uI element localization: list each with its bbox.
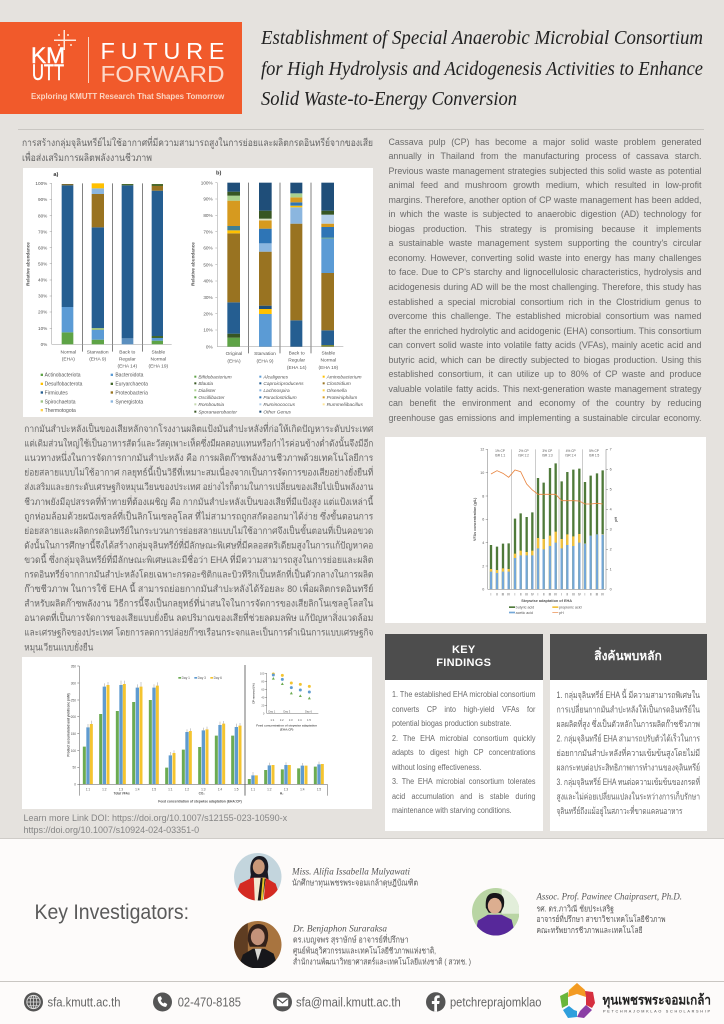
English body paragraph: a sustainable waste management system supporting the country's circular xyxy=(388,238,702,248)
Thai heading xyxy=(22,136,373,164)
logo wordmark: PETCHRAJOMKLAO SCHOLARSHIP xyxy=(603,1010,710,1014)
chart b: genus abundance: 30% xyxy=(203,295,213,300)
logo wordmark FUTURE FORWARD xyxy=(100,40,224,84)
footer contact: phone xyxy=(153,992,241,1012)
logo mark: KMUTT xyxy=(31,30,76,84)
inset: CP removal plot: 80 xyxy=(261,679,265,683)
chart b: genus abundance: 0% xyxy=(206,344,213,349)
bar Starvation xyxy=(259,183,272,347)
propionic acid bars xyxy=(491,532,603,589)
panel: gas production chart: 0 xyxy=(74,783,76,787)
panel: gas production chart: 1:4 xyxy=(218,788,222,792)
name: Benjaphon: Dr. Benjaphon Suraraksa xyxy=(293,924,387,934)
findings list: 2. The EHA microbial consortium quickly xyxy=(392,734,535,743)
footer contact: facebook xyxy=(426,992,542,1012)
panel: gas production chart: 1:1 xyxy=(251,788,255,792)
panel: VFA stepwise adaptation chart: VFAs concentration (g/L) xyxy=(473,497,477,541)
panel: VFA stepwise adaptation chart: II xyxy=(566,593,568,597)
footer contact: email xyxy=(273,992,401,1012)
panel: gas production chart: Feed concentration of stepwise adaptation (EHA:CP) xyxy=(158,799,242,803)
panel: gas production chart: 1:1 xyxy=(168,788,173,792)
panel: VFA stepwise adaptation chart: 4 xyxy=(482,541,484,545)
panel: VFA stepwise adaptation chart: 5% CP xyxy=(589,449,599,453)
panel: gas production chart: CO₂ xyxy=(199,792,205,796)
axes xyxy=(77,666,327,796)
findings list: 3. The EHA microbial consortium tolerates xyxy=(392,777,535,786)
chart b: genus abundance: Relative abundance xyxy=(190,242,195,286)
chart b: genus abundance: (EHA) xyxy=(227,358,241,364)
inset: CP removal plot: Day 1 xyxy=(268,709,276,713)
panel: gas production chart: 1:5 xyxy=(152,788,156,792)
legend a: Euryarchaeota xyxy=(115,382,148,388)
inset: CP removal plot: 1:1 xyxy=(270,718,275,722)
panel: gas production chart: 150 xyxy=(71,732,76,736)
English body paragraph: biogas production. This strategy is promising because it implements xyxy=(388,224,702,234)
English body paragraph: greenhouse gas emissions and implementing a sustainable circular economy. xyxy=(388,413,702,423)
panel: VFA stepwise adaptation chart: 10 xyxy=(480,471,484,475)
chart b: genus abundance: 70% xyxy=(203,229,213,234)
legend a: Proteobacteria xyxy=(115,390,148,396)
bar Starvation xyxy=(92,183,104,344)
panel: VFA stepwise adaptation chart: III xyxy=(596,593,598,597)
panel: gas production chart: 50 xyxy=(72,766,76,770)
panel: gas production chart: 1:2 xyxy=(267,788,272,792)
legend a: Synergistota xyxy=(115,399,143,405)
bar Stable Normal xyxy=(152,184,163,344)
Thai findings list xyxy=(556,688,700,817)
panel: gas production chart: 1:3 xyxy=(284,788,288,792)
bar Back to Regular xyxy=(122,184,133,344)
panel: gas production chart xyxy=(22,657,372,809)
panel: VFA stepwise adaptation chart: 3% CP xyxy=(542,449,552,453)
legend b: Dialister xyxy=(198,388,216,394)
legend b: Oscillibacter xyxy=(198,395,225,401)
legend b: Paraclostridium xyxy=(263,395,297,401)
Thai heading: เพื่อส่งเสริมการผลิตพลังงานชีวภาพ xyxy=(22,151,152,164)
English body paragraph: acidogenesis during AD will be the most challenging. Therefore, this study has xyxy=(388,282,702,292)
panel: VFA stepwise adaptation chart: I xyxy=(491,593,492,597)
chart a: phylum abundance: Normal xyxy=(61,349,76,355)
heading: Thai key findings: สิ่งค้นพบหลัก xyxy=(594,649,662,663)
name: Alifia: Miss. Alifia Issabella Mulyawati xyxy=(292,866,410,878)
inset: CP removal plot: 1:5 xyxy=(307,718,311,722)
legend b: Rummeliibacillus xyxy=(327,402,363,408)
panel: VFA stepwise adaptation chart: Stepwise adaptation of EHA xyxy=(521,599,572,603)
panel: VFA stepwise adaptation chart: 1 xyxy=(610,568,612,572)
chart a: phylum abundance: 100% xyxy=(35,181,47,186)
English body paragraph: margins. Therefore, another option of CP waste management has been added, xyxy=(388,195,702,205)
chart a: phylum abundance: 60% xyxy=(38,245,47,250)
logo mark: KMUTT: KM xyxy=(31,43,65,68)
legend a: Actinobacteriota xyxy=(45,373,81,379)
logo divider xyxy=(88,37,89,83)
logo tagline: Exploring KMUTT Research That Shapes Tomorrow xyxy=(31,92,224,101)
inset: CP removal plot: 1:3 xyxy=(289,718,293,722)
panel: VFA stepwise adaptation chart: 4 xyxy=(610,508,612,512)
logo: Petchra Pra Jom Klao scholarship xyxy=(560,983,711,1018)
panel: VFA stepwise adaptation chart: ISR 1:4 xyxy=(565,453,576,457)
butyric acid bars xyxy=(491,463,603,589)
chart a: phylum abundance: (EHA) xyxy=(62,356,75,362)
legend a: Desulfobacterota xyxy=(45,382,83,388)
panel: gas production chart: 1:3 xyxy=(119,788,123,792)
chart b: genus abundance xyxy=(190,170,363,415)
legend: pH xyxy=(559,611,564,615)
chart a: phylum abundance: Relative abundance xyxy=(26,242,31,286)
panel: VFA stepwise adaptation chart: 12 xyxy=(480,448,484,452)
panel: VFA stepwise adaptation chart: I xyxy=(561,593,562,597)
English body paragraph: economy. However, converting solid waste into energy has many challenges xyxy=(388,253,702,263)
chart a: phylum abundance: (EHA 14) xyxy=(118,364,138,370)
bar Original xyxy=(227,183,240,347)
English body paragraph: Cassava pulp (CP) has become a major solid waste problem generated xyxy=(388,136,702,146)
legend b: Romboutsia xyxy=(198,402,224,408)
chart b: genus abundance: (EHA 14) xyxy=(287,365,307,371)
panel: VFA stepwise adaptation chart: II xyxy=(590,593,592,597)
portrait: Alifia xyxy=(234,853,282,900)
chart a: phylum abundance: 0% xyxy=(41,342,47,347)
legend b: Alcaligenes xyxy=(262,374,289,380)
panel: VFA stepwise adaptation chart: III xyxy=(502,593,504,597)
English body paragraph: established consortium, it can utilize up to 80% of CP waste and produce xyxy=(388,369,702,379)
bar Stable Normal xyxy=(321,183,334,347)
legend b: Lachnospira xyxy=(263,388,290,394)
chart b: genus abundance: Back to xyxy=(289,350,305,356)
English body paragraph: Previous waste management strategies subjected this solid waste as potential xyxy=(388,166,702,176)
panel: VFA stepwise adaptation chart: 2 xyxy=(610,548,612,552)
chart a: phylum abundance: a) xyxy=(53,172,58,178)
title: Solid Waste-to-Energy Conversion xyxy=(261,88,517,110)
inset: CP removal plot: 40 xyxy=(261,695,265,699)
chart b: genus abundance: 40% xyxy=(203,279,213,284)
legend: Day 3 xyxy=(198,676,206,680)
chart a: phylum abundance: 30% xyxy=(38,294,47,299)
legend: propionic acid xyxy=(559,606,582,610)
panel: gas production chart: 1:4 xyxy=(135,788,140,792)
panel: VFA stepwise adaptation chart: 1% CP xyxy=(495,449,505,453)
legend b: Clostridium xyxy=(327,381,351,387)
chart a: phylum abundance: Back to xyxy=(119,349,136,355)
icon: facebook xyxy=(426,992,446,1012)
inset: CP removal plot: Feed concentration of stepwise adaptation xyxy=(256,724,317,728)
panel: key investigators xyxy=(0,838,724,1024)
title xyxy=(261,27,703,110)
panel: VFA stepwise adaptation chart: ISR 1:5 xyxy=(589,453,600,457)
inset: CP removal plot: 1:2 xyxy=(280,718,284,722)
legend b: Bifidobacterium xyxy=(198,374,232,380)
Thai body paragraph: หมุนเวียนแบบยั่งยืน xyxy=(24,640,94,653)
name: Benjaphon xyxy=(293,924,471,966)
legend a: Thermotogota xyxy=(45,408,76,414)
icon: phone xyxy=(153,992,172,1012)
chart a: phylum abundance: 20% xyxy=(38,310,47,315)
panel: VFA stepwise adaptation chart: 0 xyxy=(482,588,484,592)
DOI links xyxy=(24,813,287,835)
panel: VFA stepwise adaptation chart: IV xyxy=(601,593,605,597)
panel: gas production chart: Product accumulated and yield/conc (mM) xyxy=(67,693,71,757)
panel: gas production chart: 250 xyxy=(71,698,76,702)
chart a: phylum abundance: 80% xyxy=(38,213,47,218)
panel: VFA stepwise adaptation chart: ISR 1:3 xyxy=(542,453,553,457)
day 3 bars xyxy=(88,685,319,784)
bar Back to Regular xyxy=(290,183,302,347)
panel: VFA stepwise adaptation chart: ISR 1:2 xyxy=(518,453,529,457)
icon: mail xyxy=(273,992,292,1012)
panel: VFA stepwise adaptation chart: 8 xyxy=(482,494,484,498)
chart a: phylum abundance: (EHA 9) xyxy=(89,356,107,362)
panel: gas production chart: 1:5 xyxy=(317,788,321,792)
chart a: phylum abundance: 10% xyxy=(38,326,47,331)
panel: VFA stepwise adaptation chart: I xyxy=(585,593,586,597)
findings list: 1. The established EHA microbial consortium xyxy=(392,690,535,699)
icon: globe xyxy=(24,992,43,1012)
legend a: Firmicutes xyxy=(45,390,68,396)
chart b: genus abundance: 100% xyxy=(201,180,213,185)
panel: VFA stepwise adaptation chart: III xyxy=(572,593,575,597)
chart b: genus abundance: Regular xyxy=(288,358,306,364)
panel: gas production chart: 300 xyxy=(71,681,76,685)
inset: CP removal plot: 1:4 xyxy=(298,718,302,722)
inset: CP removal plot: 0 xyxy=(263,711,265,715)
chart a: phylum abundance: Normal xyxy=(151,356,166,362)
legend xyxy=(178,676,222,680)
findings list xyxy=(392,690,536,815)
header logo block xyxy=(0,22,242,114)
name: Benjaphon: ดร.เบญจพร สุราษักษ์ อาจารย์ที่ปรึกษา xyxy=(293,933,409,945)
chart a: phylum abundance: 90% xyxy=(38,197,47,202)
panel: gas production chart: H₂ xyxy=(280,792,284,796)
pH line xyxy=(491,470,603,504)
chart b: genus abundance: (EHA 19) xyxy=(319,365,339,371)
panel: VFA stepwise adaptation chart: 5 xyxy=(610,488,612,492)
chart b: genus abundance: Normal xyxy=(321,358,336,364)
panel: gas production chart: Total VFAs xyxy=(114,792,130,796)
inset: CP removal plot: 100 xyxy=(260,671,265,675)
panel: gas production chart: 1:5 xyxy=(234,788,239,792)
day 1 bars xyxy=(84,700,315,784)
English body paragraph: after the enriched hydrolytic and acidogenic (EHA) consortium. This consortium xyxy=(388,326,702,336)
English body paragraph: in which the waste is subjected to anaerobic digestion (AD) technology for xyxy=(388,209,702,219)
name: Benjaphon: ศูนย์พันธุวิศวกรรมและเทคโนโลยีชีวภาพแห่งชาติ, xyxy=(293,945,436,956)
panel: VFA stepwise adaptation chart: 6 xyxy=(610,468,612,472)
panel: VFA stepwise adaptation chart: IV xyxy=(578,593,582,597)
panel: VFA stepwise adaptation chart: 2% CP xyxy=(519,449,529,453)
panel: VFA stepwise adaptation chart: III xyxy=(525,593,528,597)
inset: CP removal plot xyxy=(252,671,318,731)
chart a: phylum abundance: (EHA 19) xyxy=(149,364,169,370)
panel: VFA stepwise adaptation chart: pH xyxy=(614,517,618,522)
panel: gas production chart: 1:3 xyxy=(201,788,206,792)
chart b: genus abundance: Starvation xyxy=(254,351,276,357)
chart b: genus abundance: 80% xyxy=(203,213,213,218)
bar Normal xyxy=(62,184,73,344)
chart a: phylum abundance: Starvation xyxy=(87,349,109,355)
panel: gas production chart: 100 xyxy=(71,749,76,753)
heading: key findings xyxy=(385,634,542,680)
legend xyxy=(509,606,582,615)
name: Pawinee xyxy=(536,891,682,934)
English body paragraph: annually in Thailand from the manufacturing process of cassava starch. xyxy=(388,151,702,161)
findings list: without losing effectiveness. xyxy=(392,763,482,772)
panel: VFA stepwise adaptation chart: 4% CP xyxy=(566,449,576,453)
chart b: genus abundance: 60% xyxy=(203,246,213,251)
panel: VFA stepwise adaptation chart: 7 xyxy=(610,448,612,452)
findings list: converts CP into high-yield VFAs for xyxy=(392,705,535,714)
findings list: potential biogas production substrate. xyxy=(392,719,512,728)
panel: VFA stepwise adaptation chart: IV xyxy=(554,593,558,597)
panel: VFA stepwise adaptation chart: II xyxy=(520,593,522,597)
panel: VFA stepwise adaptation chart: II xyxy=(496,593,498,597)
acetic acid bars xyxy=(491,534,603,589)
panel: VFA stepwise adaptation chart: I xyxy=(538,593,539,597)
legend a: Bacteroidota xyxy=(115,373,144,379)
Thai body paragraph xyxy=(24,422,374,653)
panel: key findings xyxy=(385,634,542,831)
inset: CP removal plot: Day 6 xyxy=(305,709,312,713)
English body paragraph: butyric acid, which can be directly subjected to biogas production. Using this xyxy=(388,355,702,365)
panel: gas production chart: 200 xyxy=(71,715,76,719)
legend b: Caproiciproducens xyxy=(263,381,304,387)
panel: VFA stepwise adaptation chart: 0 xyxy=(610,588,612,592)
chart a: phylum abundance: Regular xyxy=(119,356,136,362)
English body paragraph xyxy=(388,136,702,423)
panel: relative abundance charts xyxy=(23,168,373,417)
legend: Day 6 xyxy=(214,676,222,680)
legend b: Olsenella xyxy=(327,388,347,394)
DOI links: https://doi.org/10.1007/s10924-024-03351-0 xyxy=(24,825,199,835)
inset: CP removal plot: 20 xyxy=(261,703,265,707)
chart b: genus abundance: 90% xyxy=(203,197,213,202)
panel: VFA stepwise adaptation chart: 2 xyxy=(482,564,484,568)
chart a: phylum abundance: 70% xyxy=(38,229,47,234)
legend a: Spirochaetota xyxy=(45,399,76,405)
DOI links: Learn more Link DOI: https://doi.org/10.1007/s12155-023-10590-x xyxy=(24,813,287,823)
panel: VFA stepwise adaptation chart: IV xyxy=(531,593,535,597)
icon: colour star xyxy=(560,983,595,1018)
panel: VFA stepwise adaptation chart xyxy=(385,437,706,623)
panel: gas production chart: 1:2 xyxy=(185,788,189,792)
portrait: Pawinee xyxy=(472,888,519,936)
panel: gas production chart: 1:4 xyxy=(300,788,305,792)
chart b: genus abundance: Original xyxy=(226,351,242,357)
chart b: genus abundance: b) xyxy=(216,170,221,176)
legend: acetic acid xyxy=(516,611,533,615)
chart a: phylum abundance: 40% xyxy=(38,278,47,283)
English body paragraph: valuable volatile fatty acids. This next-generation waste management strategy xyxy=(388,384,702,394)
legend: Day 1 xyxy=(182,676,190,680)
portrait: Benjaphon xyxy=(234,921,282,968)
heading: Thai key findings xyxy=(550,634,706,680)
panel: VFA stepwise adaptation chart: I xyxy=(515,593,516,597)
legend b: Ruminococcus xyxy=(263,402,296,408)
findings list: adapts to digest high CP concentrations xyxy=(392,748,535,757)
panel: VFA stepwise adaptation chart: 3 xyxy=(610,528,612,532)
panel: key findings in Thai xyxy=(550,634,706,831)
panel: VFA stepwise adaptation chart: II xyxy=(543,593,545,597)
panel: gas production chart: 1:1 xyxy=(86,788,90,792)
findings list: maintenance with starving conditions. xyxy=(392,806,512,815)
English body paragraph: can convert solid waste into volatile fatty acids (VFAs), mainly acetic acid and xyxy=(388,340,702,350)
chart b: genus abundance: Stable xyxy=(321,350,335,356)
legend b: Blautia xyxy=(198,381,213,387)
English body paragraph: to face. Due to CP's starchy and lignocellulosic characteristics, hydrolysis and xyxy=(388,267,702,277)
panel: VFA stepwise adaptation chart: IV xyxy=(507,593,511,597)
English body paragraph: can benefit the environment and economy of the country by reducing xyxy=(388,398,702,408)
footer contact: website xyxy=(24,992,120,1012)
findings list: acid accumulation and is stable during xyxy=(392,792,535,801)
day 6 bars xyxy=(91,684,322,784)
inset: CP removal plot: 60 xyxy=(261,687,265,691)
English body paragraph: animal feed and mushroom growth medium, which resulted in low-profit xyxy=(388,180,702,190)
chart b: genus abundance: 10% xyxy=(203,328,213,333)
inset: CP removal plot: (EHA:CP) xyxy=(280,727,293,731)
English body paragraph: overcome this challenge. The established microbial consortium was named xyxy=(388,311,702,321)
legend: butyric acid xyxy=(516,606,534,610)
panel: VFA stepwise adaptation chart: ISR 1:1 xyxy=(495,453,506,457)
heading: key findings: KEY xyxy=(452,644,476,656)
legend b xyxy=(194,374,363,415)
inset: CP removal plot: Day 3 xyxy=(283,709,291,713)
chart a: phylum abundance xyxy=(26,172,172,414)
chart a: phylum abundance: Stable xyxy=(151,349,165,355)
axes xyxy=(486,449,608,589)
error bars xyxy=(88,681,319,775)
legend b: Aminobacterium xyxy=(326,374,362,380)
inset: CP removal plot: CP removal (%) xyxy=(252,683,256,704)
chart a: phylum abundance: 50% xyxy=(38,261,47,266)
chart b: genus abundance: 20% xyxy=(203,311,213,316)
name: Pawinee: รศ. ดร.ภาวิณี ชัยประเสริฐ xyxy=(536,903,614,913)
legend b: Other Genus xyxy=(263,409,292,415)
chart b: genus abundance: (EHA 9) xyxy=(257,358,274,364)
legend b: Proteiniphilum xyxy=(327,395,357,401)
heading: key findings: FINDINGS xyxy=(436,657,491,669)
panel: VFA stepwise adaptation chart: 6 xyxy=(482,518,484,522)
panel: VFA stepwise adaptation chart: III xyxy=(549,593,551,597)
legend b: Sporanaerobacter xyxy=(198,409,237,415)
panel: gas production chart: 350 xyxy=(71,664,76,668)
panel: gas production chart: 1:2 xyxy=(102,788,107,792)
name: Alifia xyxy=(292,866,418,889)
legend a xyxy=(41,373,148,414)
chart b: genus abundance: 50% xyxy=(203,262,213,267)
English body paragraph: established a special microbial consortium rich in the Clostridium genus to xyxy=(388,297,702,307)
